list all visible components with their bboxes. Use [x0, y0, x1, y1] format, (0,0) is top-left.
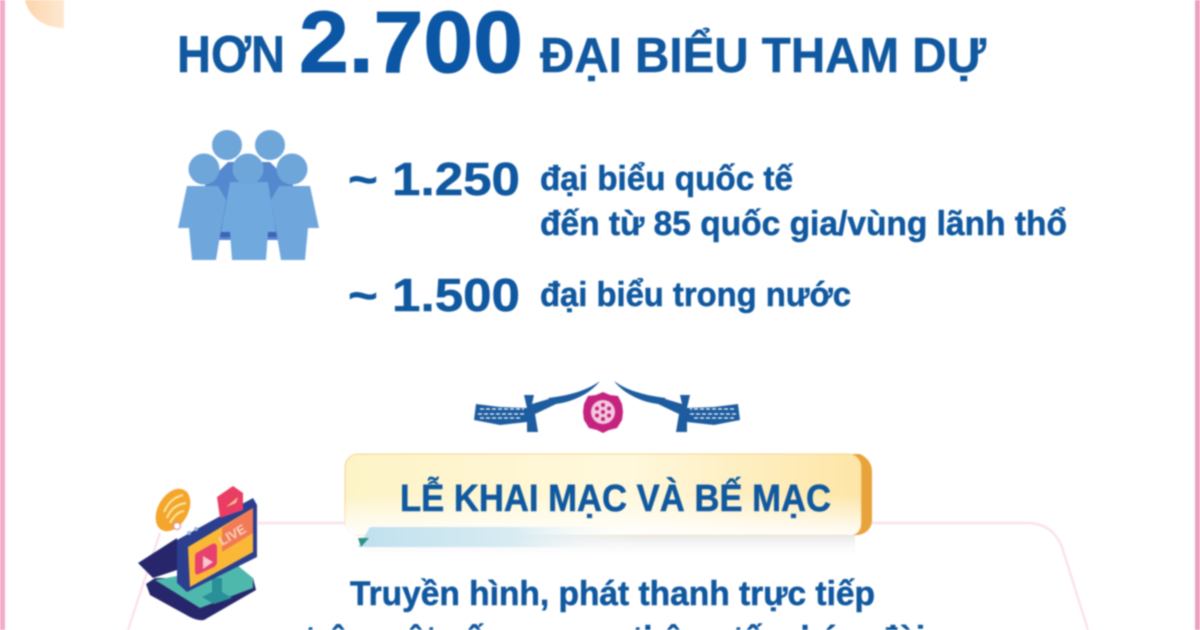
- stat: international delegates: [348, 153, 1067, 243]
- icon: group of people: [178, 130, 319, 260]
- banner: opening and closing ceremony: [345, 454, 872, 559]
- stat: domestic delegates: đại biểu trong nước: [540, 276, 851, 314]
- icon: live broadcast monitor: [138, 483, 257, 620]
- panel outline: broadcast frame: [128, 523, 1088, 630]
- icon: lotus flower: [583, 392, 623, 433]
- title: ĐẠI BIỂU THAM DỰ: [540, 28, 986, 83]
- body text: broadcast description: [305, 575, 925, 630]
- right pink border: [1195, 0, 1200, 630]
- stat: domestic delegates: ~ 1.500: [348, 269, 520, 321]
- icon: left dragon: [474, 381, 600, 432]
- title: HƠN: [177, 26, 285, 84]
- left pink border: [0, 0, 5, 630]
- stat: international delegates: ~ 1.250: [348, 153, 520, 205]
- stat: international delegates: đến từ 85 quốc gia/vùng lãnh thổ: [540, 205, 1067, 243]
- stat: international delegates: đại biểu quốc tế: [540, 160, 793, 198]
- icon: right dragon: [614, 381, 740, 432]
- peach corner decoration: [25, 0, 64, 28]
- ornament: lotus and dragons divider: [474, 381, 740, 433]
- stat: domestic delegates: [348, 269, 851, 321]
- icon: live broadcast monitor: LIVE: [216, 521, 249, 549]
- banner heading: LỄ KHAI MẠC VÀ BẾ MẠC: [400, 476, 831, 520]
- title: [177, 0, 986, 91]
- body text: broadcast description: Truyền hình, phát thanh trực tiếp: [350, 575, 875, 613]
